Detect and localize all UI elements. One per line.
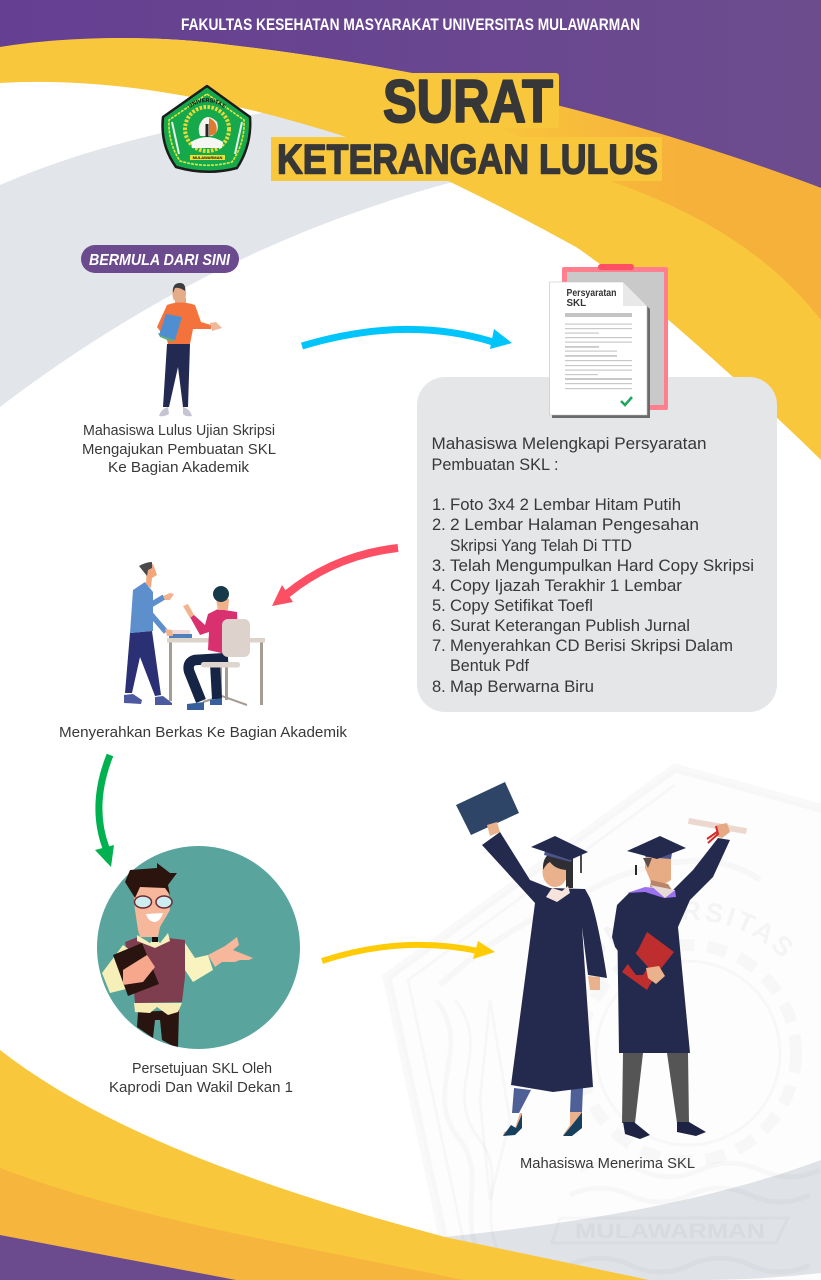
background: bottom yellow swoosh <box>0 1050 649 1280</box>
icon: clipboard with document: SKL <box>566 298 586 309</box>
requirements list: Skripsi Yang Telah Di TTD <box>450 537 632 555</box>
watermark: university crest <box>482 902 792 1243</box>
requirements list: 2. <box>432 516 446 534</box>
caption: student: Mahasiswa Lulus Ujian Skripsi <box>83 422 275 439</box>
gown sleeve <box>612 905 648 975</box>
requirements list: Menyerahkan CD Berisi Skripsi Dalam <box>450 637 733 655</box>
arrow: yellow <box>322 941 495 961</box>
logo: university crest <box>161 84 252 173</box>
watermark: university crest: MULAWARMAN <box>575 1220 765 1243</box>
panel heading <box>432 435 706 474</box>
logo: university crest: MULAWARMAN <box>193 155 222 160</box>
caption: receive letter: Mahasiswa Menerima SKL <box>520 1155 695 1172</box>
requirements list: Telah Mengumpulkan Hard Copy Skripsi <box>450 557 754 575</box>
requirements list: 5. <box>432 597 446 615</box>
requirements list: Copy Setifikat Toefl <box>450 597 593 615</box>
arrow: green <box>95 755 114 867</box>
logo: university crest: UNIVERSITAS <box>188 98 226 108</box>
graduate: man <box>612 818 747 1139</box>
title: SURAT: SURAT <box>383 68 553 135</box>
requirements list: 8. <box>432 678 446 696</box>
background: lower gray swoosh <box>445 1160 821 1280</box>
requirements list: Map Berwarna Biru <box>450 678 594 696</box>
requirements list: 2 Lembar Halaman Pengesahan <box>450 516 699 534</box>
icon: clipboard with document <box>550 264 668 418</box>
caption: approval: Persetujuan SKL Oleh <box>132 1060 272 1077</box>
panel heading: Pembuatan SKL : <box>432 456 558 474</box>
title: KETERANGAN LULUS: KETERANGAN LULUS <box>277 136 658 182</box>
background: bottom orange swoosh <box>0 1168 510 1280</box>
red folder <box>622 932 674 990</box>
illustration: graduates <box>456 782 747 1139</box>
badge: start here: BERMULA DARI SINI <box>89 252 230 269</box>
requirements list <box>432 496 754 696</box>
requirements list: Copy Ijazah Terakhir 1 Lembar <box>450 577 683 595</box>
requirements list: Surat Keterangan Publish Jurnal <box>450 617 690 635</box>
requirements list: Foto 3x4 2 Lembar Hitam Putih <box>450 496 681 514</box>
panel: requirements <box>417 377 777 712</box>
requirements list: 7. <box>432 637 446 655</box>
illustration: submitting files at desk <box>124 562 265 710</box>
graduate: woman <box>456 782 607 1136</box>
caption: student: Mengajukan Pembuatan SKL <box>82 441 276 458</box>
caption: student <box>82 422 276 476</box>
arrow: pink <box>272 548 398 606</box>
illustration: approving lecturer in teal circle <box>97 846 300 1049</box>
requirements list: 1. <box>432 496 446 514</box>
header: faculty name: FAKULTAS KESEHATAN MASYARAKAT UNIVERSITAS MULAWARMAN <box>181 16 640 34</box>
arrow: cyan <box>302 329 512 349</box>
badge: start here <box>81 245 239 273</box>
icon: clipboard with document: Persyaratan <box>566 288 617 299</box>
requirements list: Bentuk Pdf <box>450 657 529 675</box>
caption: student: Ke Bagian Akademik <box>108 459 250 476</box>
background: top yellow swoosh <box>0 38 821 460</box>
caption: approval <box>109 1060 293 1096</box>
caption: submitting files: Menyerahkan Berkas Ke Bagian Akademik <box>59 724 348 741</box>
caption: approval: Kaprodi Dan Wakil Dekan 1 <box>109 1079 293 1096</box>
requirements list: 4. <box>432 577 446 595</box>
watermark: university crest: UNIVERSITAS <box>601 902 792 956</box>
illustration: student with books <box>157 283 222 416</box>
background: top purple band <box>0 0 821 192</box>
requirements list: 6. <box>432 617 446 635</box>
background: bottom purple swoosh <box>0 1235 236 1280</box>
background: upper gray swoosh <box>0 110 460 407</box>
panel heading: Mahasiswa Melengkapi Persyaratan <box>432 435 706 453</box>
background: top orange swoosh <box>547 106 821 320</box>
requirements list: 3. <box>432 557 446 575</box>
